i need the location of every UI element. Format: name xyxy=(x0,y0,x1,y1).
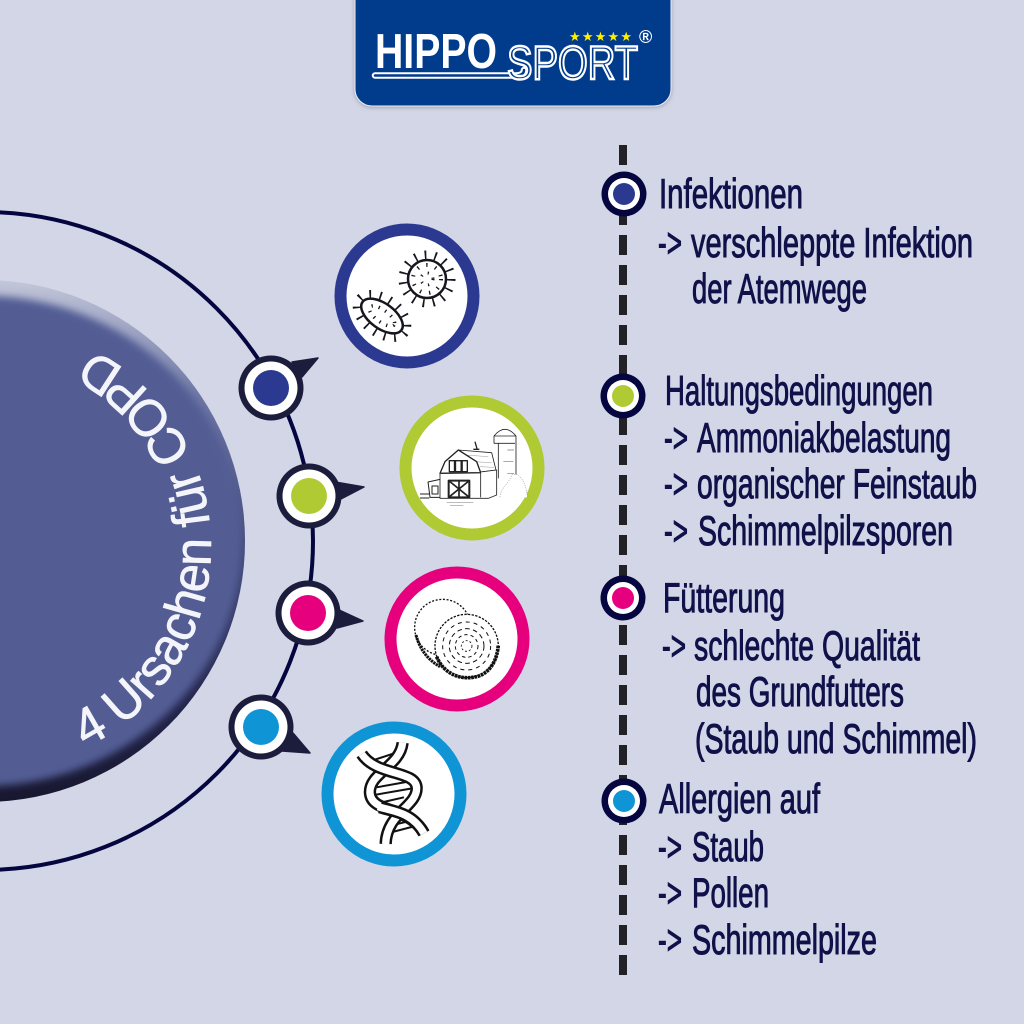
text block: Infektionen: Infektionen xyxy=(659,170,803,217)
text block: Infektionen: -> xyxy=(658,219,682,266)
text block: Infektionen xyxy=(658,170,973,312)
timeline node: allergies xyxy=(602,778,646,824)
text block: Haltungsbedingungen: -> xyxy=(664,414,688,461)
central disc with title: 4 Ursachen für COPD xyxy=(80,356,212,741)
text block: Fütterung: des Grundfutters xyxy=(696,668,904,715)
text block: Allergien auf: -> xyxy=(658,823,682,870)
text block: Allergien auf: -> xyxy=(658,869,682,916)
text block: Fütterung: schlechte Qualität xyxy=(694,622,920,669)
marker: infections xyxy=(238,356,318,420)
marker: housing xyxy=(276,464,364,528)
marker: allergies xyxy=(228,694,310,760)
text block: Haltungsbedingungen: -> xyxy=(664,507,688,554)
text block: Allergien auf: Staub xyxy=(692,823,764,870)
text block: Allergien auf: Schimmelpilze xyxy=(692,916,877,963)
logo: Hippo Sport: ★★★★★ xyxy=(569,30,632,45)
outer ring xyxy=(0,212,313,870)
icon: bacteria xyxy=(340,230,474,362)
timeline dashed line xyxy=(619,145,627,975)
timeline node: infections xyxy=(602,172,646,216)
logo: Hippo Sport xyxy=(355,0,671,106)
logo: Hippo Sport: ® xyxy=(639,27,652,47)
text block: Fütterung xyxy=(662,574,977,762)
timeline node: housing xyxy=(600,374,646,418)
logo: Hippo Sport: SPORT xyxy=(507,36,638,89)
text block: Fütterung: -> xyxy=(662,622,686,669)
text block: Allergien auf xyxy=(658,775,877,963)
text block: Allergien auf: -> xyxy=(658,916,682,963)
logo: Hippo Sport: HIPPO xyxy=(375,25,497,79)
marker: feeding xyxy=(276,580,363,646)
text block: Haltungsbedingungen: -> xyxy=(664,460,688,507)
icon: barn xyxy=(406,402,538,534)
icon: DNA helix xyxy=(328,728,460,860)
timeline node: feeding xyxy=(600,576,646,620)
text block: Fütterung: Fütterung xyxy=(663,574,785,621)
central disc with title xyxy=(0,280,245,802)
text block: Infektionen: der Atemwege xyxy=(692,265,867,312)
text block: Allergien auf: Allergien auf xyxy=(659,775,820,822)
icon: hay bales xyxy=(390,572,524,706)
text block: Allergien auf: Pollen xyxy=(692,869,769,916)
text block: Haltungsbedingungen xyxy=(664,367,977,554)
